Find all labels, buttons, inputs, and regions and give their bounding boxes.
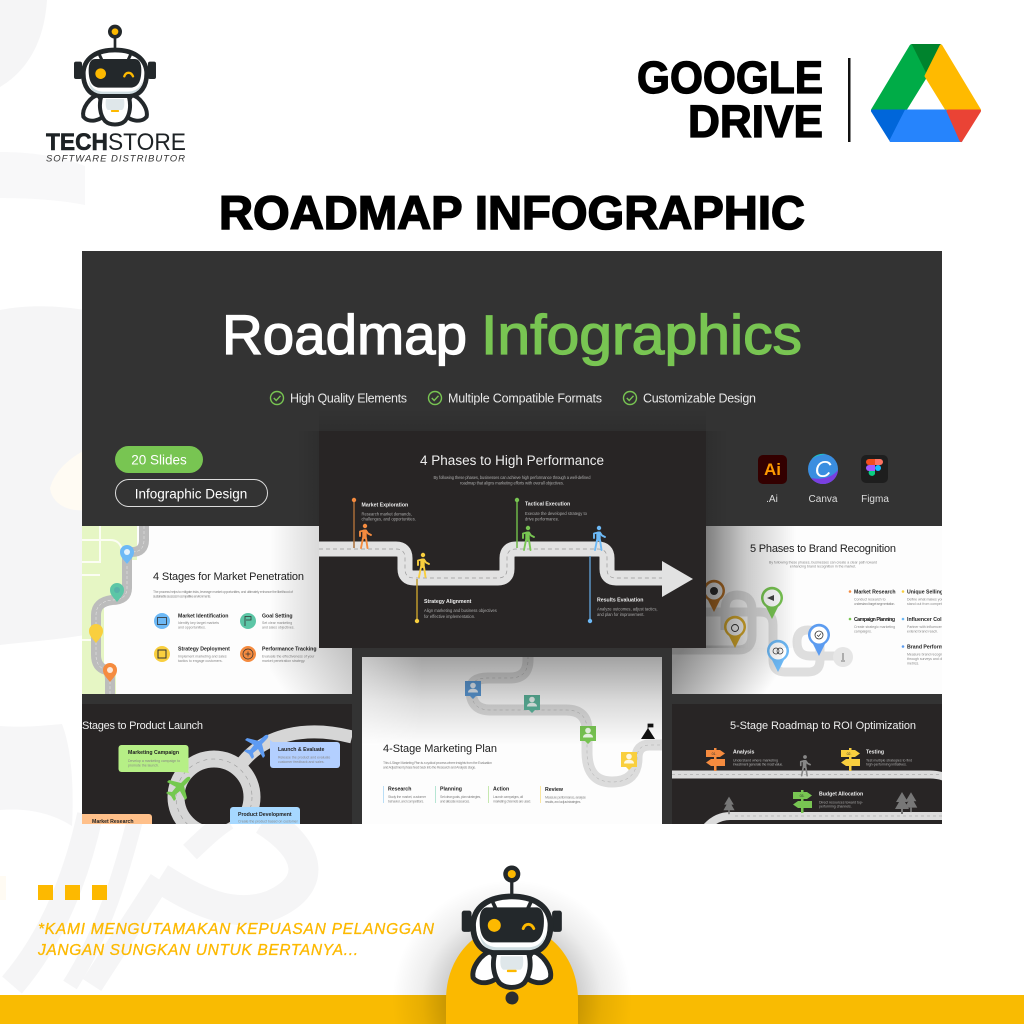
slide intro: By following these phases, businesses can achieve high performance through a well-defined bbox=[434, 475, 591, 480]
step: research bbox=[383, 786, 427, 804]
icon: Canva bbox=[808, 454, 838, 505]
slide intro: sustainable success in competitive environments. bbox=[153, 594, 211, 598]
road bbox=[96, 526, 144, 694]
phase: strategy alignment: Strategy Alignment bbox=[424, 599, 472, 605]
phase: market exploration: challenges, and opportunities. bbox=[362, 516, 416, 522]
sign: budget allocation bbox=[793, 790, 864, 813]
banner title: Infographics bbox=[481, 303, 802, 366]
slide intro: roadmap that aligns marketing efforts with overall objectives. bbox=[460, 480, 564, 486]
phase: campaign planning bbox=[849, 617, 895, 634]
callout: launch and evaluate bbox=[270, 740, 340, 768]
callout: product development bbox=[230, 807, 300, 824]
phase: influencer collaboration bbox=[902, 617, 942, 632]
sign: analysis: Understand where marketing bbox=[733, 758, 778, 762]
panel: 5-stage roadmap to ROI optimization bbox=[672, 704, 950, 830]
slide intro bbox=[153, 590, 293, 598]
trees bbox=[723, 792, 917, 814]
feature list bbox=[270, 392, 756, 406]
icon: robot mascot bbox=[462, 866, 562, 987]
slide heading: 5 Phases to Brand Recognition bbox=[750, 543, 896, 555]
logo: TechStore bbox=[46, 25, 186, 165]
phase: campaign planning: Campaign Planning bbox=[854, 617, 895, 623]
feature: customizable: Customizable Design bbox=[643, 392, 756, 406]
slide heading: 4-Stage Marketing Plan bbox=[383, 743, 497, 755]
slide intro bbox=[383, 761, 492, 770]
step: review: results, and adjust strategies. bbox=[545, 800, 581, 804]
stage: market identification: and opportunities. bbox=[178, 626, 206, 630]
footer message: JANGAN SUNGKAN UNTUK BERTANYA... bbox=[37, 942, 358, 959]
panel: 4 stages for market penetration bbox=[82, 526, 352, 694]
icon: blue plane bbox=[244, 735, 268, 759]
callout: market research: Market Research bbox=[92, 819, 134, 825]
icon: robot mascot logo bbox=[74, 25, 156, 124]
background pattern bbox=[0, 0, 303, 985]
pin: market research bbox=[706, 580, 725, 612]
callout: market research bbox=[82, 814, 152, 824]
stage: performance tracking: Evaluate the effectiveness of your bbox=[262, 654, 315, 658]
road network bbox=[672, 595, 843, 672]
phase: results evaluation: Analyze outcomes, adjust tactics, bbox=[597, 606, 658, 612]
step: research: Study the market, customer bbox=[388, 795, 427, 799]
phase: results evaluation: and plan for improvement. bbox=[597, 612, 645, 617]
callout: marketing campaign: Develop a marketing campaign to bbox=[128, 759, 180, 763]
sign: budget allocation: performing channels. bbox=[819, 804, 852, 808]
sign: analysis bbox=[706, 748, 783, 771]
step: planning bbox=[435, 786, 481, 804]
marker: review bbox=[621, 752, 637, 770]
step: planning: Set clear goals, plan strategies, bbox=[440, 795, 481, 799]
slide heading: 5-Stage Roadmap to ROI Optimization bbox=[730, 720, 916, 732]
stage: goal setting bbox=[240, 613, 295, 630]
stage: market identification bbox=[154, 613, 228, 630]
road bbox=[471, 650, 670, 782]
sign: testing: 02. bbox=[847, 752, 851, 756]
pin: unique selling bbox=[724, 616, 746, 648]
road loop bbox=[243, 732, 352, 762]
badge: 20 slides bbox=[115, 446, 203, 473]
icon: Adobe Illustrator: .Ai bbox=[766, 494, 778, 505]
heading text drive: DRIVE bbox=[688, 96, 823, 147]
footer decoration squares bbox=[38, 885, 107, 900]
pin: brand performance bbox=[808, 624, 830, 656]
step: action: marketing channels are used. bbox=[493, 800, 531, 804]
marker: action bbox=[580, 726, 596, 744]
title: ROADMAP INFOGRAPHIC bbox=[219, 186, 805, 239]
footer band bbox=[0, 995, 1024, 1024]
phase: strategy alignment: for effective implementation. bbox=[424, 614, 475, 619]
phase: market research: understand target segmentation. bbox=[854, 602, 895, 606]
callout: product development: Product Development bbox=[238, 812, 292, 818]
sign: analysis: investment generate the most value. bbox=[733, 762, 783, 766]
stage: market identification: Identify key target markets bbox=[178, 621, 219, 625]
badge: infographic design bbox=[116, 480, 268, 506]
phase: market exploration bbox=[352, 498, 416, 548]
icon: Adobe Illustrator: Ai bbox=[764, 460, 781, 479]
callout: marketing campaign bbox=[118, 745, 189, 773]
sign: budget allocation: 03. bbox=[800, 794, 804, 798]
sign: testing: Test multiple strategies to find bbox=[866, 758, 912, 762]
slide heading: 4 Stages for Market Penetration bbox=[153, 571, 304, 583]
badge: infographic design: Infographic Design bbox=[135, 486, 247, 502]
phase: campaign planning: campaigns. bbox=[854, 630, 872, 634]
step: planning: Planning bbox=[440, 786, 462, 792]
stage: goal setting: and sales objectives. bbox=[262, 626, 295, 630]
phase: market exploration: Research market demands, bbox=[362, 512, 412, 516]
panel: 5 phases to brand recognition bbox=[672, 526, 967, 694]
stage: strategy deployment: tactics to engage customers. bbox=[178, 659, 223, 663]
callout: marketing campaign: Marketing Campaign bbox=[128, 750, 179, 756]
phase: tactical execution: Tactical Execution bbox=[525, 502, 570, 508]
callout: marketing campaign: promote the launch. bbox=[128, 764, 159, 768]
icon: Figma: Figma bbox=[861, 494, 889, 505]
badge: 20 slides: 20 Slides bbox=[131, 452, 187, 468]
slide intro bbox=[434, 475, 591, 486]
phase: influencer collaboration: extend brand reach. bbox=[907, 630, 938, 634]
icon: Adobe Illustrator bbox=[758, 455, 787, 505]
pin: influencer collaboration bbox=[767, 640, 789, 672]
slide background bbox=[319, 431, 706, 648]
slide intro: enhancing brand recognition in the market. bbox=[790, 564, 856, 568]
road end marker bbox=[833, 647, 853, 667]
stage: goal setting: Goal Setting bbox=[262, 614, 293, 620]
slide intro: The process helps to mitigate risks, leverage market opportunities, and ultimately enhance the likelihood of bbox=[153, 590, 293, 594]
icon: Figma bbox=[861, 455, 889, 505]
phase: unique selling: Unique Selling bbox=[907, 590, 943, 596]
feature: quality: High Quality Elements bbox=[290, 392, 407, 406]
icon: mountain flag bbox=[641, 724, 655, 739]
stage: performance tracking: market penetration strategy. bbox=[262, 659, 305, 663]
sign: testing: Testing bbox=[866, 750, 884, 756]
sign: budget allocation: Budget Allocation bbox=[819, 792, 863, 798]
step: planning: and allocate resources. bbox=[440, 800, 470, 804]
marker: research bbox=[465, 681, 481, 699]
phase: tactical execution bbox=[515, 498, 588, 550]
step: review: Measure performance, analyze bbox=[545, 796, 586, 800]
slide intro: This 4-Stage Marketing Plan is a cyclical process where insights from the Evaluation bbox=[383, 761, 492, 765]
phase: brand performance: Measure brand recognition bbox=[907, 652, 949, 656]
step: action: Launch campaigns, all bbox=[493, 795, 523, 799]
phase: campaign planning: Create strategic marketing bbox=[854, 625, 895, 629]
figure: walker bbox=[801, 755, 810, 776]
step: action: Action bbox=[493, 786, 509, 792]
icon: Google Drive bbox=[872, 46, 980, 140]
phase: market research: Conduct research to bbox=[854, 598, 886, 602]
callout: launch and evaluate: Release the product and evaluate bbox=[278, 756, 330, 760]
map background bbox=[82, 526, 137, 694]
heading: Google Drive bbox=[637, 52, 850, 147]
slide intro: By following these phases, businesses can create a clear path toward bbox=[769, 560, 877, 564]
phase: brand performance: through surveys and digital bbox=[907, 657, 949, 661]
stage: strategy deployment: Strategy Deployment bbox=[178, 646, 230, 652]
step: research: behavior, and competitors. bbox=[388, 800, 424, 804]
step: review: Review bbox=[545, 787, 564, 793]
pin: campaign planning bbox=[761, 587, 783, 619]
banner background bbox=[82, 251, 942, 824]
feature: formats: Multiple Compatible Formats bbox=[448, 392, 602, 406]
sign: testing: high-performing initiatives. bbox=[866, 762, 907, 766]
panel: 4 phases to high performance bbox=[297, 409, 728, 648]
mascot backdrop bbox=[446, 925, 578, 1024]
stage: performance tracking bbox=[240, 646, 316, 663]
sign: testing bbox=[841, 748, 912, 771]
panel: product banner bbox=[82, 251, 942, 824]
callout: launch and evaluate: Launch & Evaluate bbox=[278, 747, 325, 753]
step: research: Research bbox=[388, 786, 411, 792]
banner title bbox=[222, 303, 802, 366]
banner title: Roadmap bbox=[222, 303, 467, 366]
phase: tactical execution: Execute the developed strategy to bbox=[525, 511, 588, 516]
mascot button bbox=[506, 992, 518, 1004]
sign: analysis: 01. bbox=[712, 752, 716, 756]
phase: results evaluation: Results Evaluation bbox=[597, 598, 643, 604]
sign: analysis: Analysis bbox=[733, 750, 754, 756]
phase: market research: Market Research bbox=[854, 590, 896, 596]
phase: market research bbox=[849, 590, 896, 606]
footer message bbox=[37, 921, 435, 959]
icon: green plane bbox=[166, 777, 190, 801]
stage: market identification: Market Identification bbox=[178, 614, 228, 620]
logo tagline: SOFTWARE DISTRIBUTOR bbox=[46, 154, 185, 164]
callout: launch and evaluate: customer feedback and sales. bbox=[278, 760, 325, 764]
sign: budget allocation: Direct resources toward top- bbox=[819, 800, 864, 804]
phase: strategy alignment bbox=[415, 553, 497, 623]
stage: goal setting: Set clear marketing bbox=[262, 621, 292, 625]
phase: influencer collaboration: Influencer Collaboration bbox=[907, 617, 967, 623]
marker: planning bbox=[524, 695, 540, 713]
mascot bbox=[392, 866, 632, 1024]
phase: unique selling: stand out from competitors. bbox=[907, 602, 949, 606]
panel: stages to product launch bbox=[82, 704, 352, 824]
phase: market exploration: Market Exploration bbox=[362, 502, 408, 508]
slide heading: Stages to Product Launch bbox=[82, 720, 203, 732]
stage: strategy deployment: Implement marketing and sales bbox=[178, 654, 227, 658]
stage: strategy deployment bbox=[154, 646, 230, 663]
step: review bbox=[540, 786, 586, 804]
callout: product development: Create the product based on customer bbox=[238, 820, 299, 824]
stage: performance tracking: Performance Tracking bbox=[262, 646, 316, 652]
phase: unique selling: Define what makes your brand bbox=[907, 598, 955, 602]
icon: Canva: Canva bbox=[809, 494, 838, 505]
phase: unique selling bbox=[902, 590, 942, 606]
phase: brand performance bbox=[902, 644, 942, 664]
icon: Canva: C bbox=[815, 456, 832, 482]
location pins bbox=[89, 545, 134, 682]
heading text google: GOOGLE bbox=[637, 52, 823, 103]
logo wordmark: TECHSTORE bbox=[46, 129, 186, 156]
phase: strategy alignment: Align marketing and business objectives bbox=[424, 608, 497, 613]
step: action bbox=[488, 786, 531, 804]
panel: 4-stage marketing plan bbox=[362, 650, 670, 824]
road with arrow bbox=[319, 549, 693, 597]
phase: influencer collaboration: Partner with influencers to bbox=[907, 625, 948, 629]
phase: tactical execution: drive performance. bbox=[525, 516, 559, 522]
slide intro bbox=[769, 560, 877, 568]
slide heading: 4 Phases to High Performance bbox=[420, 453, 604, 468]
phase: brand performance: Brand Performance bbox=[907, 644, 955, 650]
roads bbox=[672, 774, 950, 830]
slide intro: and Adjustment phase feed back into the Research and Analysis stage. bbox=[383, 766, 476, 770]
footer message: *KAMI MENGUTAMAKAN KEPUASAN PELANGGAN bbox=[38, 921, 435, 938]
phase: results evaluation bbox=[588, 526, 658, 623]
phase: brand performance: metrics. bbox=[907, 662, 919, 666]
